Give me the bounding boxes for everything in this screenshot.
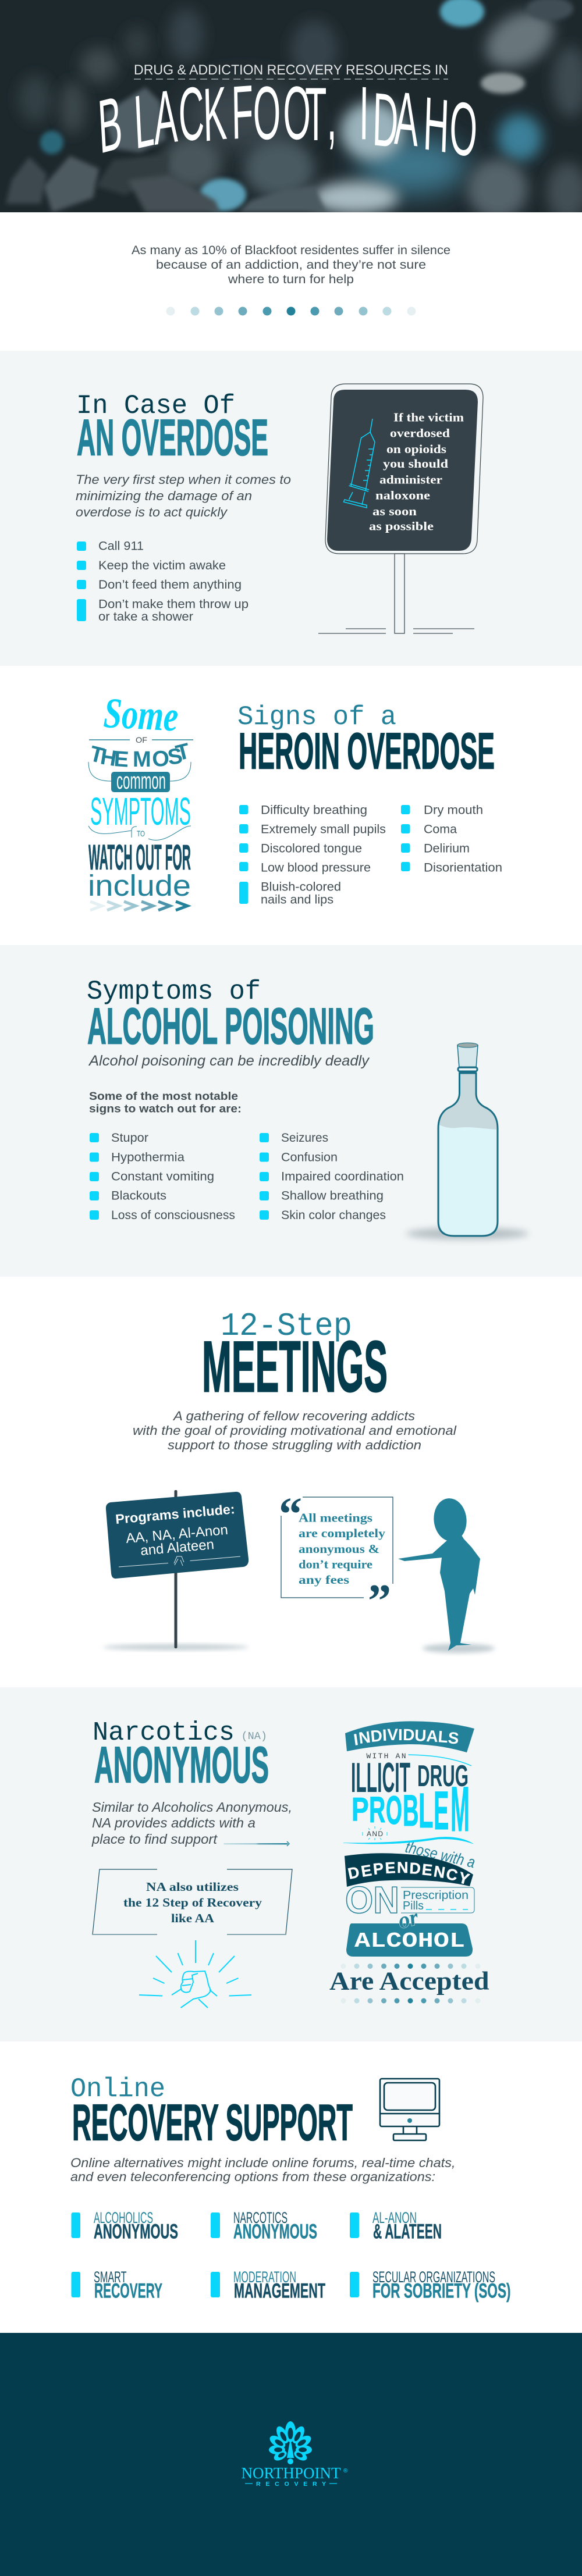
lettering: some of the most common symptoms: THE MOST <box>87 739 193 772</box>
meetings intro text <box>133 1409 457 1452</box>
sign text: If the victim <box>393 411 464 425</box>
alcohol symptoms list <box>90 1131 404 1222</box>
logo mark: peacock <box>268 2421 313 2464</box>
lettering: individuals accepted: B <box>403 1786 418 1835</box>
sign text: as soon <box>372 504 417 518</box>
meetings intro text: A gathering of fellow recovering addicts <box>172 1409 415 1423</box>
lettering: individuals accepted: DEPENDENCY <box>346 1859 471 1888</box>
heading: narcotics anonymous: (NA) <box>241 1731 267 1743</box>
lettering: individuals accepted: M <box>450 1773 470 1845</box>
panel: signs of a heroin overdose: WATCH OUT FOR <box>88 838 191 877</box>
intro text <box>132 244 450 286</box>
person silhouette <box>398 1497 495 1653</box>
lettering: individuals accepted: AND <box>367 1830 383 1838</box>
panel: footer <box>0 2333 582 2576</box>
heading: recovery support <box>70 2074 353 2151</box>
quote box: “ <box>279 1489 302 1540</box>
12 step callout box <box>93 1869 292 1934</box>
lettering: individuals accepted: INDIVIDUALS <box>353 1726 460 1749</box>
online intro text: Online alternatives might include online forums, real-time chats, <box>70 2155 455 2170</box>
sign text <box>369 411 464 533</box>
logo: northpoint recovery: NORTHPOINT <box>241 2464 341 2482</box>
panel: online recovery support <box>70 2074 511 2302</box>
sign text: overdosed <box>390 426 450 440</box>
sign text: you should <box>383 457 448 471</box>
alcohol intro text: Alcohol poisoning can be incredibly deadly <box>88 1053 370 1069</box>
lettering: individuals accepted: ALCOHOL <box>354 1929 465 1953</box>
icon: bottle <box>406 1043 528 1239</box>
organization: narcotics anonymous: NARCOTICS <box>233 2209 288 2226</box>
organization: secular organizations for sobriety: SECULAR ORGANIZATIONS <box>372 2268 495 2286</box>
overdose checklist: Keep the victim awake <box>98 559 226 572</box>
lettering: individuals accepted: WITH AN <box>367 1752 406 1761</box>
organization: secular organizations for sobriety: FOR SOBRIETY (SOS) <box>372 2280 511 2302</box>
overdose intro text: minimizing the damage of an <box>76 489 252 503</box>
chevrons <box>90 902 187 910</box>
overdose intro text <box>76 472 291 519</box>
narcotics intro text: Similar to Alcoholics Anonymous, <box>92 1800 292 1815</box>
heroin symptoms list: Delirium <box>424 842 470 855</box>
alcohol symptoms list: Shallow breathing <box>281 1189 384 1203</box>
heading: overdose <box>76 391 268 466</box>
organization: smart recovery: RECOVERY <box>94 2280 162 2302</box>
lettering: individuals accepted: those with a <box>404 1839 477 1871</box>
heroin symptoms list: Low blood pressure <box>261 861 371 875</box>
intro text: As many as 10% of Blackfoot residentes suffer in silence <box>132 244 450 257</box>
lettering: individuals accepted: O <box>386 1787 402 1833</box>
heading: narcotics anonymous: Narcotics <box>93 1718 235 1748</box>
quote box: All meetings <box>299 1511 372 1525</box>
online intro text: and even teleconferencing options from these organizations: <box>70 2169 435 2184</box>
heading: meetings: 12-Step <box>221 1307 352 1345</box>
lettering: individuals accepted: R <box>369 1790 385 1830</box>
sign text: naloxone <box>375 489 430 503</box>
heading: narcotics anonymous <box>93 1718 269 1794</box>
logo: northpoint recovery: RECOVERY <box>256 2481 326 2488</box>
overdose intro text: The very first step when it comes to <box>76 472 291 487</box>
heading: recovery support: Online <box>70 2074 165 2104</box>
panel: 12-step meetings <box>103 1307 495 1653</box>
organization: al-anon and alateen <box>350 2209 442 2243</box>
icon: computer monitor <box>380 2079 439 2140</box>
heading: meetings <box>202 1307 388 1408</box>
panel: in case of an overdose <box>0 351 582 666</box>
lettering: individuals accepted: Are Accepted <box>329 1967 489 1995</box>
panel: 12-step meetings: MEETINGS <box>202 1327 388 1408</box>
road sign <box>318 384 483 633</box>
organization: moderation management <box>211 2268 325 2302</box>
narcotics intro text <box>91 1800 292 1847</box>
organization: moderation management: MANAGEMENT <box>234 2280 325 2302</box>
alcohol symptoms list: Hypothermia <box>111 1150 184 1164</box>
sign text: on opioids <box>386 442 446 456</box>
organization: smart recovery <box>71 2268 162 2302</box>
12 step callout box: NA also utilizes <box>146 1880 239 1894</box>
hero dashed rule <box>134 79 448 80</box>
heroin symptoms list: Extremely small pupils <box>261 822 386 836</box>
heading: overdose: In Case Of <box>76 391 235 421</box>
alcohol symptoms list: Confusion <box>281 1150 338 1164</box>
heroin symptoms list: Dry mouth <box>424 804 483 817</box>
icon: syringe <box>343 419 375 508</box>
organization: alcoholics anonymous: ANONYMOUS <box>94 2221 178 2243</box>
intro text: because of an addiction, and they’re not sure <box>156 258 426 272</box>
alcohol symptoms list: Constant vomiting <box>111 1170 214 1183</box>
alcohol list heading: Some of the most notable <box>89 1091 238 1103</box>
logo: northpoint recovery: ® <box>343 2468 348 2474</box>
title: BLACKFOOT, IDAHO <box>96 69 479 174</box>
lettering: individuals accepted: Prescription <box>403 1889 469 1902</box>
organization: smart recovery: SMART <box>94 2268 127 2286</box>
panel: symptoms of alcohol poisoning <box>0 945 582 1277</box>
intro text: where to turn for help <box>228 273 354 286</box>
lettering: some of the most common symptoms: Some <box>102 689 179 741</box>
icon: clasped hands <box>139 1940 251 2008</box>
intro dots <box>166 307 416 315</box>
programs sign: and Alateen <box>140 1537 215 1559</box>
lettering: some of the most common symptoms: OF <box>136 735 147 744</box>
heading: narcotics anonymous: ANONYMOUS <box>94 1736 269 1794</box>
arrow <box>223 1841 289 1846</box>
overdose checklist: Call 911 <box>98 540 144 553</box>
meetings intro text: support to those struggling with addiction <box>168 1438 421 1452</box>
organization: alcoholics anonymous <box>71 2209 178 2243</box>
organization: narcotics anonymous <box>211 2209 317 2243</box>
heroin symptoms list: Discolored tongue <box>261 842 362 855</box>
organization: narcotics anonymous: ANONYMOUS <box>233 2221 317 2243</box>
sign text: as possible <box>369 519 434 533</box>
quote box: anonymous & <box>299 1542 379 1556</box>
lettering: individuals accepted: E <box>434 1781 449 1841</box>
overdose intro text: overdose is to act quickly <box>76 505 228 519</box>
quote box: ” <box>368 1576 391 1627</box>
panel: hero <box>0 0 582 221</box>
narcotics intro text: place to find support <box>91 1832 218 1847</box>
heroin symptoms list: Coma <box>424 822 457 836</box>
lettering: individuals accepted: DRUG <box>417 1759 469 1793</box>
overdose checklist <box>77 540 249 623</box>
12 step callout box: like AA <box>171 1911 215 1925</box>
logo: northpoint recovery <box>241 2421 348 2488</box>
heading: alcohol poisoning <box>87 977 374 1055</box>
lettering: individuals accepted: Pills <box>403 1900 424 1912</box>
programs sign: AA, NA, Al-Anon <box>125 1522 229 1547</box>
lettering: individuals accepted: ILLICIT <box>351 1755 410 1801</box>
alcohol symptoms list: Blackouts <box>111 1189 166 1203</box>
lettering: individuals accepted: or <box>395 1904 421 1934</box>
heading: alcohol poisoning: Symptoms of <box>87 977 261 1007</box>
lettering: some of the most common symptoms: include <box>88 869 191 902</box>
heroin symptoms list: Bluish-colored <box>261 881 341 893</box>
alcohol symptoms list: Impaired coordination <box>281 1170 404 1183</box>
lettering: individuals accepted <box>329 1721 489 2003</box>
lettering: individuals accepted: L <box>418 1784 434 1839</box>
alcohol symptoms list: Loss of consciousness <box>111 1209 235 1222</box>
panel: signs of a heroin overdose: SYMPTOMS <box>90 790 191 833</box>
lettering: individuals accepted: P <box>352 1791 369 1827</box>
sign text: administer <box>379 472 442 486</box>
organization: al-anon and alateen: & ALATEEN <box>373 2221 442 2243</box>
overdose checklist: Don’t make them throw up <box>98 598 249 611</box>
hero eyebrow text: DRUG & ADDICTION RECOVERY RESOURCES IN <box>134 62 448 78</box>
meetings intro text: with the goal of providing motivational and emotional <box>133 1423 457 1438</box>
alcohol list heading: signs to watch out for are: <box>89 1103 242 1116</box>
dots row bottom <box>341 1998 481 2003</box>
heroin symptoms list: Disorientation <box>424 861 502 875</box>
narcotics intro text: NA provides addicts with a <box>92 1815 255 1830</box>
quote box: are completely <box>299 1526 386 1540</box>
organization: alcoholics anonymous: ALCOHOLICS <box>94 2209 153 2226</box>
heading: heroin overdose <box>237 702 495 779</box>
heading: overdose: AN OVERDOSE <box>77 408 268 466</box>
alcohol list heading <box>89 1091 242 1116</box>
hero photo background <box>0 0 582 221</box>
organization: moderation management: MODERATION <box>233 2268 296 2286</box>
organization: secular organizations for sobriety <box>350 2268 511 2302</box>
dots row top <box>341 1964 481 1969</box>
panel: signs of a heroin overdose <box>87 689 502 910</box>
heroin symptoms list <box>239 804 502 906</box>
quote box: any fees <box>299 1573 349 1587</box>
lettering: individuals accepted: ON <box>345 1879 399 1921</box>
quote box <box>279 1489 393 1627</box>
programs sign: Programs include: <box>115 1501 236 1527</box>
heroin symptoms list: nails and lips <box>261 893 333 906</box>
alcohol symptoms list: Stupor <box>111 1131 148 1145</box>
alcohol symptoms list: Seizures <box>281 1131 328 1145</box>
heading: heroin overdose: Signs of a <box>237 702 396 732</box>
lettering: some of the most common symptoms: TO <box>137 829 145 838</box>
overdose checklist: Don’t feed them anything <box>98 578 242 592</box>
programs sign <box>103 1490 249 1650</box>
lettering: some of the most common symptoms: common <box>116 768 166 794</box>
overdose checklist: or take a shower <box>98 610 193 623</box>
panel: narcotics anonymous <box>0 1687 582 2041</box>
lettering: some of the most common symptoms <box>87 689 193 910</box>
quote box: don’t require <box>299 1558 372 1572</box>
heroin symptoms list: Difficulty breathing <box>261 804 367 817</box>
alcohol symptoms list: Skin color changes <box>281 1209 386 1222</box>
organization: al-anon and alateen: AL-ANON <box>372 2209 417 2226</box>
online intro text <box>70 2155 455 2184</box>
12 step callout box: the 12 Step of Recovery <box>123 1896 262 1909</box>
